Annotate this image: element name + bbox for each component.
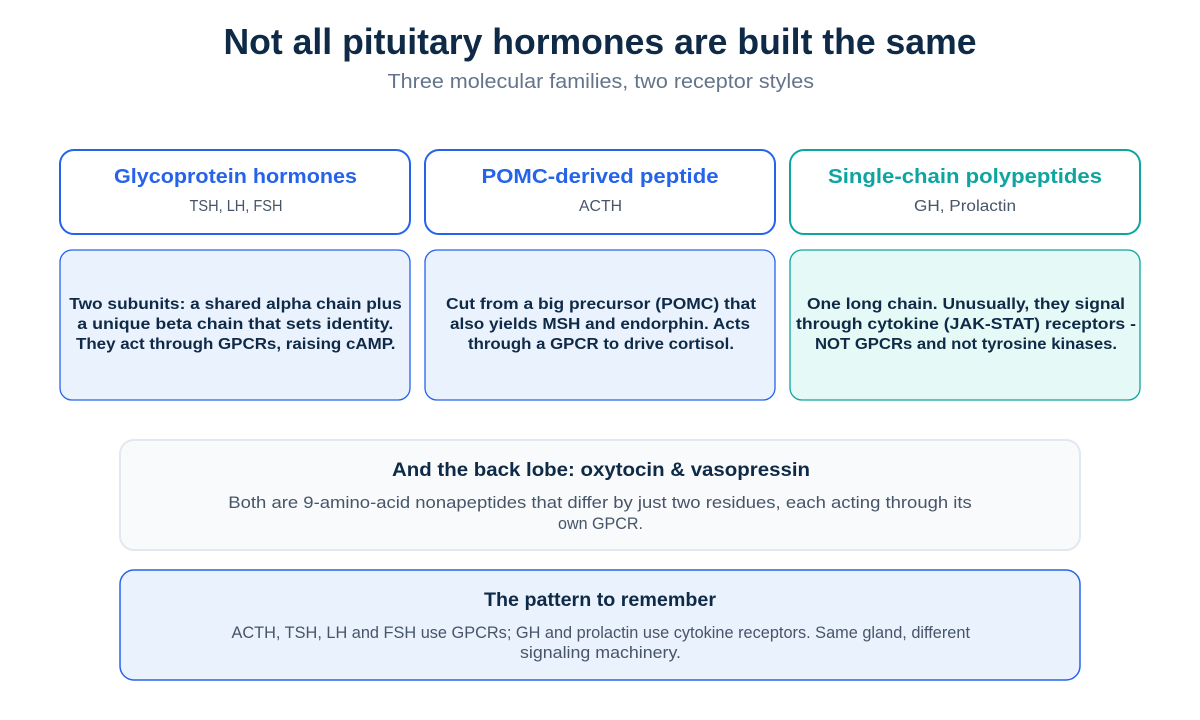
heading: pattern to remember: The pattern to remember [484, 589, 716, 611]
panel: glycoprotein description [60, 250, 410, 400]
text: glycoprotein description: a unique beta chain that sets identity. [77, 316, 393, 333]
heading: single-chain polypeptides: Single-chain polypeptides [828, 165, 1102, 188]
title: Not all pituitary hormones are built the same [224, 21, 976, 62]
text: pattern note: ACTH, TSH, LH and FSH use GPCRs; GH and prolactin use cytokine receptors. Same gland, different [232, 624, 970, 642]
text: glycoprotein description [69, 296, 402, 353]
members: GH, Prolactin: GH, Prolactin [914, 198, 1016, 215]
panel: POMC header [425, 150, 775, 234]
panel: single-chain description [790, 250, 1140, 400]
panel: back lobe [120, 440, 1080, 550]
text: back lobe note: own GPCR. [558, 515, 643, 533]
text: single-chain description: NOT GPCRs and not tyrosine kinases. [815, 336, 1117, 353]
text: POMC description [446, 296, 757, 353]
members: ACTH: ACTH [579, 198, 622, 215]
heading: back lobe: And the back lobe: oxytocin & vasopressin [392, 459, 810, 481]
text: glycoprotein description: Two subunits: a shared alpha chain plus [69, 296, 402, 313]
panel: glycoprotein header [60, 150, 410, 234]
text: pattern note [232, 624, 970, 662]
text: POMC description: Cut from a big precursor (POMC) that [446, 296, 757, 313]
panel: single-chain header [790, 150, 1140, 234]
text: single-chain description: One long chain. Unusually, they signal [807, 296, 1125, 313]
text: glycoprotein description: They act through GPCRs, raising cAMP. [76, 336, 396, 353]
text: back lobe note: Both are 9-amino-acid nonapeptides that differ by just two residues, each acting through its [228, 494, 972, 512]
subtitle: Three molecular families, two receptor styles [388, 70, 814, 93]
text: single-chain description [796, 296, 1136, 353]
text: POMC description: also yields MSH and endorphin. Acts [450, 316, 750, 333]
heading: POMC-derived peptide: POMC-derived peptide [482, 165, 718, 188]
heading: glycoprotein hormones: Glycoprotein hormones [114, 165, 357, 188]
panel: POMC description [425, 250, 775, 400]
panel: pattern to remember [120, 570, 1080, 680]
members: TSH, LH, FSH: TSH, LH, FSH [190, 198, 282, 215]
text: pattern note: signaling machinery. [520, 644, 681, 662]
text: back lobe note [228, 494, 972, 533]
text: POMC description: through a GPCR to drive cortisol. [468, 336, 734, 353]
text: single-chain description: through cytokine (JAK-STAT) receptors - [796, 316, 1136, 333]
